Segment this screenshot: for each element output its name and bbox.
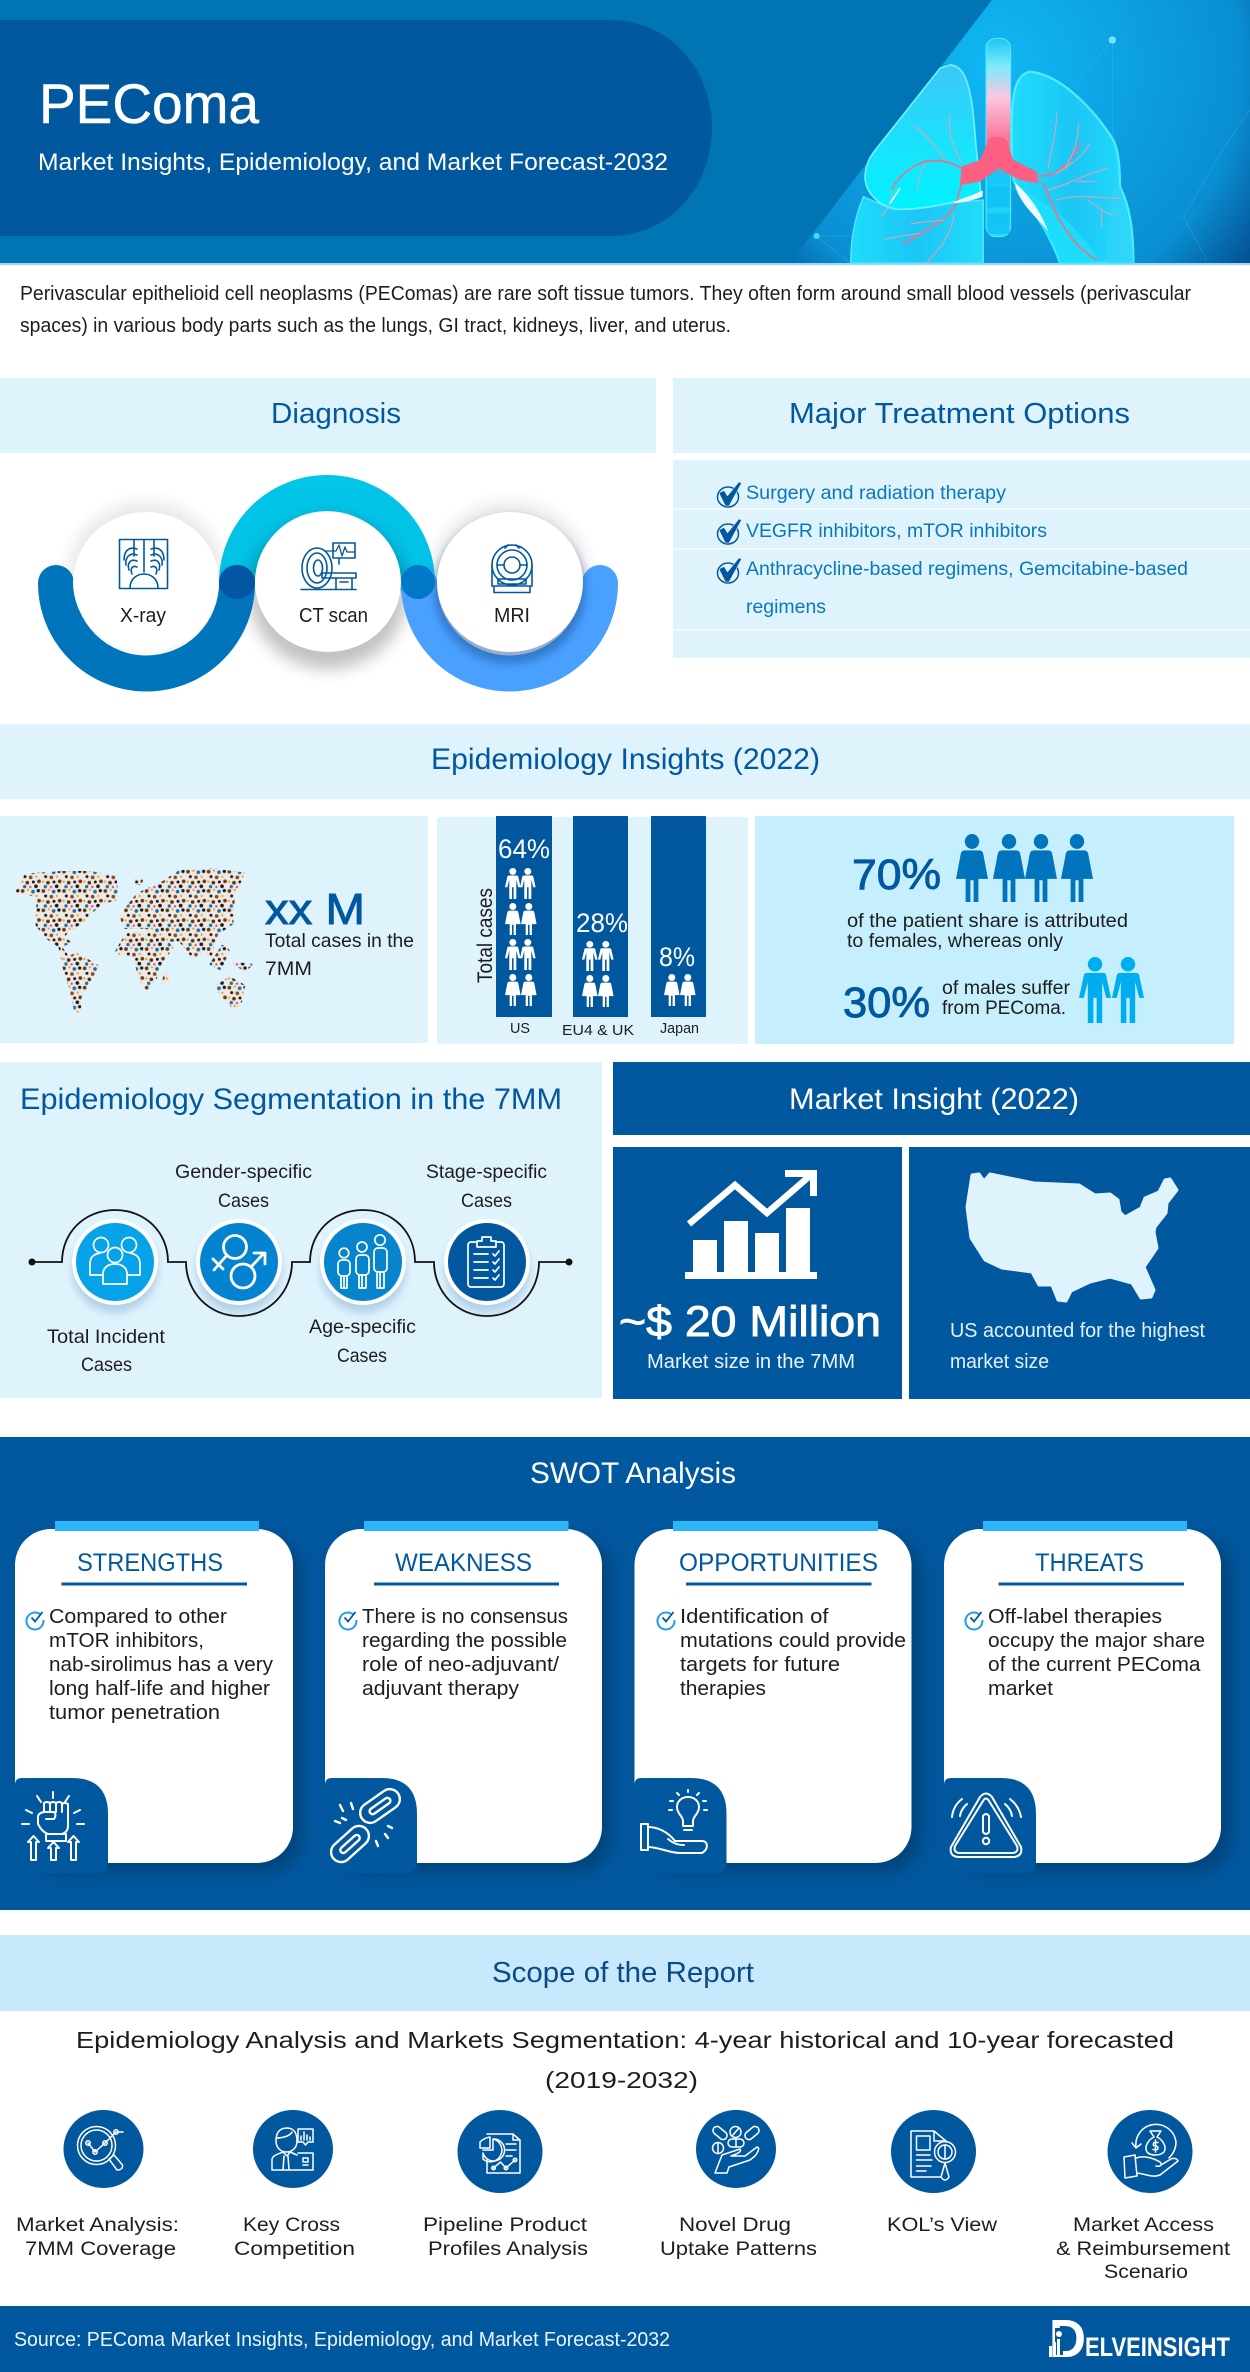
node: total incident: [72, 1219, 158, 1313]
bar labels: EU4 & UK: [562, 1022, 634, 1039]
male caption: of males suffer: [942, 978, 1071, 999]
logo: delveinsight: D: [1049, 2309, 1086, 2369]
logo: delveinsight: [1049, 2309, 1230, 2369]
scope subtitle: (2019-2032): [545, 2067, 698, 2093]
male caption: from PEComa.: [942, 998, 1066, 1019]
icon: ct scan: [301, 543, 356, 590]
opportunities text: [680, 1606, 906, 1700]
opportunities title: OPPORTUNITIES: [679, 1549, 878, 1577]
card: market size: [613, 1147, 902, 1399]
icon: family: [338, 1235, 387, 1288]
weakness text: [362, 1606, 568, 1700]
card: weakness: [325, 1521, 602, 1873]
icon: analyst: [253, 2110, 333, 2188]
market insight heading: Market Insight (2022): [789, 1083, 1079, 1116]
panel: major treatment options: [673, 378, 1250, 658]
label: x-ray: X-ray: [120, 605, 166, 627]
bar: EU4 & UK 28%: 28%: [576, 908, 628, 938]
title pill: [0, 20, 712, 236]
label: [423, 2215, 588, 2260]
stat caption: [265, 930, 414, 980]
threats text: [988, 1606, 1205, 1700]
label: stage-specific: Stage-specific: [426, 1161, 547, 1183]
opportunities text: therapies: [680, 1678, 766, 1700]
epidemiology insights heading: Epidemiology Insights (2022): [431, 743, 820, 776]
stat: market value: ~$ 20 Million: [619, 1298, 881, 1346]
label: KOL’s View: [887, 2215, 997, 2236]
scope item: market analysis: [16, 2110, 179, 2260]
icon: two males: [1079, 957, 1144, 1023]
label: Competition: [234, 2239, 355, 2260]
stat: xx M: xx M: [265, 885, 365, 934]
threats text: of the current PEComa: [988, 1654, 1201, 1676]
weakness text: role of neo-adjuvant/: [362, 1654, 559, 1676]
footer: [0, 2306, 1250, 2372]
panel: market insight: [613, 1062, 1250, 1399]
bar labels: [510, 1020, 699, 1039]
label: [234, 2215, 355, 2260]
label: & Reimbursement: [1056, 2239, 1231, 2260]
world map of people: [17, 870, 251, 1012]
scope item: kol view: [887, 2110, 997, 2236]
wave connector: [28, 1210, 572, 1316]
swot heading: SWOT Analysis: [530, 1457, 736, 1490]
threats text: occupy the major share: [988, 1630, 1205, 1652]
strengths text: tumor penetration: [49, 1702, 220, 1724]
scope heading: [0, 1935, 1250, 2011]
icon: growth chart: [685, 1174, 817, 1279]
map: united states: [967, 1174, 1177, 1301]
bar labels: US: [510, 1020, 530, 1037]
bar: US 64%: [496, 816, 552, 1017]
intro text: spaces) in various body parts such as the lungs, GI tract, kidneys, liver, and uterus.: [20, 315, 731, 337]
title: PEComa: [39, 72, 260, 135]
label: Profiles Analysis: [428, 2239, 588, 2260]
label: age-specific: [309, 1316, 416, 1367]
icon: pills in hand: [696, 2110, 776, 2188]
female caption: to females, whereas only: [847, 931, 1064, 952]
diagnosis heading: [0, 378, 656, 453]
item: regimens: regimens: [746, 597, 826, 618]
us caption: US accounted for the highest: [950, 1320, 1205, 1342]
label: Scenario: [1104, 2262, 1188, 2283]
icon: gender symbols: [213, 1236, 265, 1288]
label: Market Access: [1073, 2215, 1214, 2236]
label: Novel Drug: [679, 2215, 791, 2236]
weakness title: WEAKNESS: [395, 1549, 532, 1577]
subtitle: Market Insights, Epidemiology, and Market Forecast-2032: [38, 149, 668, 176]
stat: 70%: 70%: [852, 851, 941, 899]
intro text: [20, 283, 1191, 337]
label: gender-specific: [175, 1161, 312, 1212]
panel: regional share bar chart: [437, 816, 748, 1044]
icon tab: warning: [944, 1778, 1036, 1873]
strengths text: Compared to other: [49, 1606, 227, 1628]
label: total incident: [47, 1326, 166, 1376]
label: [16, 2215, 179, 2260]
label: ct scan: CT scan: [299, 605, 368, 627]
label: [660, 2215, 817, 2260]
stat: 30%: 30%: [843, 979, 930, 1027]
node: gender: [196, 1219, 282, 1313]
source line: Source: PEComa Market Insights, Epidemiology, and Market Forecast-2032: [14, 2328, 670, 2351]
item: surgery: Surgery and radiation therapy: [746, 483, 1007, 504]
female caption: of the patient share is attributed: [847, 911, 1128, 932]
illustration: lungs: [814, 36, 1250, 264]
icon: money in hand: [1108, 2110, 1192, 2193]
strengths text: [49, 1606, 273, 1724]
header background panel: [790, 0, 1250, 263]
strengths text: mTOR inhibitors,: [49, 1630, 204, 1652]
strengths title: STRENGTHS: [77, 1549, 223, 1577]
item: regimens: Anthracycline-based regimens, Gemcitabine-based: [746, 559, 1188, 580]
stat caption: Total cases in the: [265, 930, 414, 952]
epidemiology insights heading: [0, 724, 1250, 799]
us caption: market size: [950, 1351, 1049, 1373]
diagnosis heading: Diagnosis: [271, 398, 401, 430]
label: Key Cross: [243, 2215, 340, 2236]
label: Pipeline Product: [423, 2215, 588, 2236]
market insight heading: [613, 1062, 1250, 1135]
diagnosis chain graphic: [56, 493, 600, 674]
bar: US 64%: 64%: [498, 834, 550, 864]
panel: epidemiology segmentation: [0, 1062, 602, 1398]
threats text: market: [988, 1678, 1053, 1700]
scope item: novel drug uptake: [660, 2110, 817, 2260]
label: stage-specific: [426, 1161, 547, 1212]
card: opportunities: [634, 1521, 912, 1873]
scope subtitle: Epidemiology Analysis and Markets Segmentation: 4-year historical and 10-year forecasted: [76, 2027, 1174, 2053]
icon: report chart: [458, 2110, 542, 2193]
scope item: key cross competition: [234, 2110, 355, 2260]
label: total incident: Total Incident: [47, 1326, 166, 1348]
node: stage: [444, 1219, 530, 1313]
weakness text: There is no consensus: [362, 1606, 568, 1628]
label: Uptake Patterns: [660, 2239, 817, 2260]
bar: EU4 & UK 28%: [573, 816, 628, 1017]
bar labels: Japan: [660, 1020, 699, 1037]
icon: document magnifier: [891, 2110, 976, 2193]
icon: people: [90, 1238, 140, 1284]
strengths text: nab-sirolimus has a very: [49, 1654, 273, 1676]
weakness text: adjuvant therapy: [362, 1678, 519, 1700]
us caption: [950, 1320, 1205, 1373]
market caption: Market size in the 7MM: [647, 1351, 855, 1373]
icon: clipboard: [468, 1237, 504, 1287]
panel: gender share: [755, 816, 1234, 1044]
label: stage-specific: Cases: [461, 1190, 512, 1212]
opportunities text: Identification of: [680, 1606, 829, 1628]
threats text: Off-label therapies: [988, 1606, 1162, 1628]
weakness text: regarding the possible: [362, 1630, 567, 1652]
icon tab: strong fist: [15, 1778, 108, 1873]
label: age-specific: Age-specific: [309, 1316, 416, 1338]
label: Market Analysis:: [16, 2215, 179, 2236]
label: age-specific: Cases: [337, 1345, 387, 1367]
overlap ovals: [219, 565, 435, 599]
icon: magnifier chart: [64, 2110, 144, 2188]
stat caption: 7MM: [265, 958, 312, 980]
card: strengths: [15, 1521, 293, 1873]
opportunities text: mutations could provide: [680, 1630, 906, 1652]
icon tab: broken chain: [325, 1778, 417, 1873]
icon tab: idea in hand: [634, 1778, 726, 1873]
scope subtitle: [76, 2027, 1174, 2093]
icon: mri: [492, 545, 532, 592]
label: [1056, 2215, 1231, 2283]
item: inhibitors: VEGFR inhibitors, mTOR inhibitors: [746, 521, 1047, 542]
icon: four females: [956, 834, 1093, 902]
female caption: [847, 911, 1128, 952]
opportunities text: targets for future: [680, 1654, 840, 1676]
treatment heading: Major Treatment Options: [789, 398, 1130, 430]
label: mri: MRI: [494, 605, 530, 627]
node: age: [320, 1219, 406, 1313]
strengths text: long half-life and higher: [49, 1678, 270, 1700]
icon: x-ray: [120, 540, 168, 588]
scope item: pipeline profiles: [423, 2110, 588, 2260]
scope heading: Scope of the Report: [492, 1957, 754, 1989]
panel: swot analysis: [0, 1437, 1250, 1910]
male caption: [942, 978, 1071, 1019]
treatment heading: [673, 378, 1250, 453]
card: threats: [944, 1521, 1221, 1873]
item: regimens: [718, 558, 1188, 618]
header banner: [0, 0, 1250, 265]
label: total incident: Cases: [81, 1354, 132, 1376]
segmentation heading: Epidemiology Segmentation in the 7MM: [20, 1083, 562, 1116]
panel: total cases: [0, 816, 428, 1043]
label: gender-specific: Cases: [218, 1190, 269, 1212]
scope item: market access: [1056, 2110, 1231, 2283]
bar: Japan 8%: 8%: [659, 942, 695, 972]
label: 7MM Coverage: [25, 2239, 176, 2260]
intro text: Perivascular epithelioid cell neoplasms (PEComas) are rare soft tissue tumors. They often form around small blood vessels (perivascular: [20, 283, 1191, 305]
bar: Japan 8%: [651, 816, 706, 1017]
axis label: Total cases: [474, 888, 497, 983]
threats title: THREATS: [1035, 1549, 1144, 1577]
panel: diagnosis: [0, 378, 656, 674]
label: gender-specific: Gender-specific: [175, 1161, 312, 1183]
treatment list: [673, 460, 1250, 658]
card shadows: [24, 1537, 1232, 1873]
card: us market: [909, 1147, 1250, 1399]
